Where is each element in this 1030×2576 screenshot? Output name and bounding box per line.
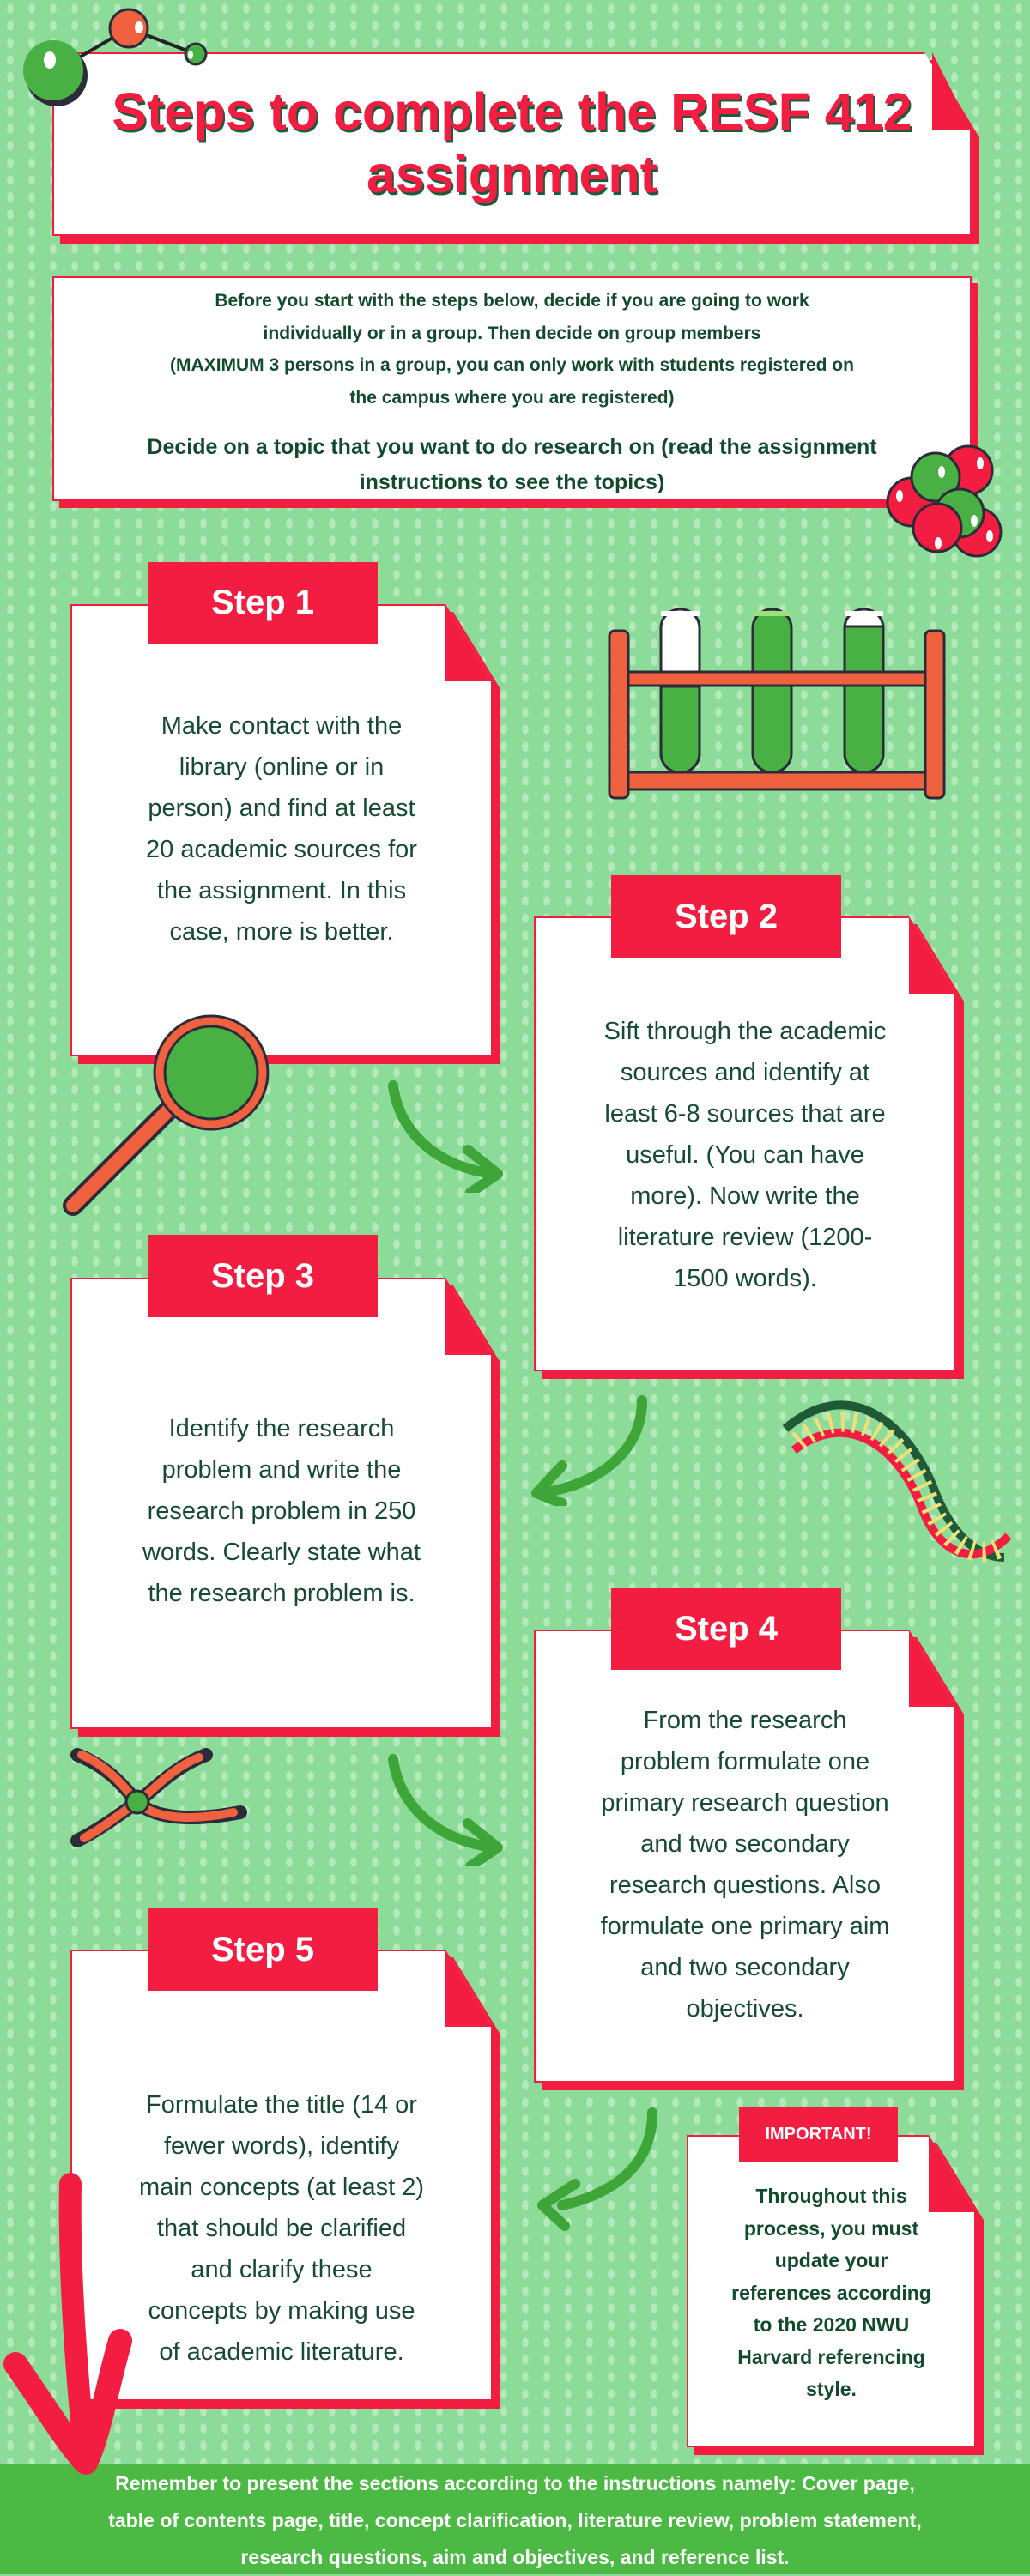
heading: step 4 xyxy=(611,1588,841,1670)
text: important note: process, you must xyxy=(744,2217,918,2240)
text: step 3: problem and write the xyxy=(162,1456,401,1484)
footer xyxy=(0,2464,1030,2574)
text: step 4: primary research question xyxy=(601,1789,889,1817)
heading: step 1 xyxy=(148,562,378,644)
text: topic xyxy=(147,435,877,494)
text: step 3: research problem in 250 xyxy=(148,1497,415,1525)
text: group decision: individually or in a group. Then decide on group members xyxy=(264,323,760,343)
heading: step 2: Step 2 xyxy=(675,898,778,935)
text: step 3: the research problem is. xyxy=(148,1580,415,1607)
title: assignment xyxy=(367,145,657,203)
text: step 2 xyxy=(604,1018,886,1292)
heading: step 2 xyxy=(611,875,841,958)
text: step 4: From the research xyxy=(644,1707,846,1734)
arrow: step 2 to step 3 xyxy=(531,1395,647,1506)
footer: research questions, aim and objectives, and reference list. xyxy=(240,2546,790,2568)
text: step 4: and two secondary xyxy=(640,1954,850,1981)
title panel xyxy=(52,52,979,244)
panel: step 3 xyxy=(70,1278,500,1737)
arrow: step 1 to step 2 xyxy=(388,1080,503,1193)
text: step 2: more). Now write the xyxy=(630,1182,860,1210)
text: step 5 xyxy=(139,2091,424,2366)
panel: step 2 xyxy=(534,916,964,1379)
text: step 4: problem formulate one xyxy=(621,1748,869,1775)
text: step 3: words. Clearly state what xyxy=(142,1539,421,1566)
text: important note: Harvard referencing xyxy=(737,2346,925,2368)
heading: step 3 xyxy=(148,1235,378,1317)
text: step 5: fewer words), identify xyxy=(164,2132,399,2160)
text: step 1: the assignment. In this xyxy=(157,877,406,904)
icon: molecule top-left xyxy=(23,9,208,106)
text: step 4: and two secondary xyxy=(640,1830,850,1858)
footer: table of contents page, title, concept clarification, literature review, problem statement, xyxy=(108,2509,922,2531)
text: step 4: research questions. Also xyxy=(609,1872,881,1899)
text: step 2: literature review (1200- xyxy=(618,1224,872,1251)
text: step 5: Formulate the title (14 or xyxy=(146,2091,417,2119)
heading: step 5 xyxy=(148,1908,378,1991)
text: step 5: of academic literature. xyxy=(159,2338,404,2366)
title: Steps to complete the RESF 412 xyxy=(112,82,912,141)
heading: important xyxy=(739,2107,898,2162)
icon: magnifying glass xyxy=(63,1014,270,1216)
text: group decision: Before you start with the steps below, decide if you are going to work xyxy=(215,291,809,311)
text: important note xyxy=(731,2185,931,2400)
icon: molecule cluster xyxy=(886,444,1003,558)
text: important note: references according xyxy=(731,2281,931,2303)
panel: step 5 xyxy=(70,1950,500,2409)
heading: important: IMPORTANT! xyxy=(765,2125,872,2144)
text: step 1 xyxy=(146,712,417,946)
text: step 1: 20 academic sources for xyxy=(146,836,417,863)
panel: intro xyxy=(52,276,972,501)
text: step 3: Identify the research xyxy=(169,1415,394,1442)
text: step 2: sources and identify at xyxy=(621,1059,869,1086)
heading: step 1: Step 1 xyxy=(211,584,314,621)
icon: DNA xyxy=(783,1400,1011,1562)
text: step 4: objectives. xyxy=(686,1995,803,2023)
panel: step 4 xyxy=(534,1630,964,2090)
text: step 4 xyxy=(601,1707,889,2023)
arrow: step 3 to step 4 xyxy=(388,1754,503,1866)
text: important note: style. xyxy=(806,2378,857,2400)
text: step 2: Sift through the academic xyxy=(604,1018,886,1045)
heading: step 4: Step 4 xyxy=(675,1610,778,1648)
panel: important note xyxy=(687,2135,984,2455)
text: group decision xyxy=(170,291,854,407)
text: step 2: 1500 words). xyxy=(673,1265,817,1292)
icon: test tubes xyxy=(608,608,946,800)
footer: Remember to present the sections according to the instructions namely: Cover page, xyxy=(115,2472,915,2494)
text: step 1: library (online or in xyxy=(179,753,384,781)
text: step 5: concepts by making use xyxy=(148,2297,415,2325)
text: group decision: (MAXIMUM 3 persons in a group, you can only work with students registered on xyxy=(170,355,854,375)
text: step 5: and clarify these xyxy=(191,2256,373,2283)
text: important note: update your xyxy=(775,2249,888,2271)
title xyxy=(112,82,912,206)
arrow: step 4 to step 5 xyxy=(537,2107,657,2231)
text: step 3 xyxy=(142,1415,421,1607)
text: step 4: formulate one primary aim xyxy=(601,1913,889,1940)
text: step 2: useful. (You can have xyxy=(626,1141,864,1169)
text: step 1: person) and find at least xyxy=(148,795,415,822)
text: step 2: least 6-8 sources that are xyxy=(604,1100,886,1128)
text: topic: instructions to see the topics) xyxy=(360,470,664,494)
text: step 5: main concepts (at least 2) xyxy=(139,2174,424,2201)
panel: step 1 xyxy=(70,604,500,1064)
text: step 1: Make contact with the xyxy=(161,712,402,740)
text: group decision: the campus where you are registered) xyxy=(349,388,675,407)
text: step 1: case, more is better. xyxy=(169,918,394,946)
text: step 5: that should be clarified xyxy=(157,2215,406,2242)
text: important note: to the 2020 NWU xyxy=(754,2313,909,2336)
heading: step 3: Step 3 xyxy=(211,1257,314,1295)
text: important note: Throughout this xyxy=(755,2185,907,2207)
text: topic: Decide on a topic that you want to do research on (read the assignment xyxy=(147,435,877,459)
arrow: big red down arrow xyxy=(3,2173,132,2475)
heading: step 5: Step 5 xyxy=(211,1931,314,1968)
icon: chromosome xyxy=(70,1748,247,1847)
